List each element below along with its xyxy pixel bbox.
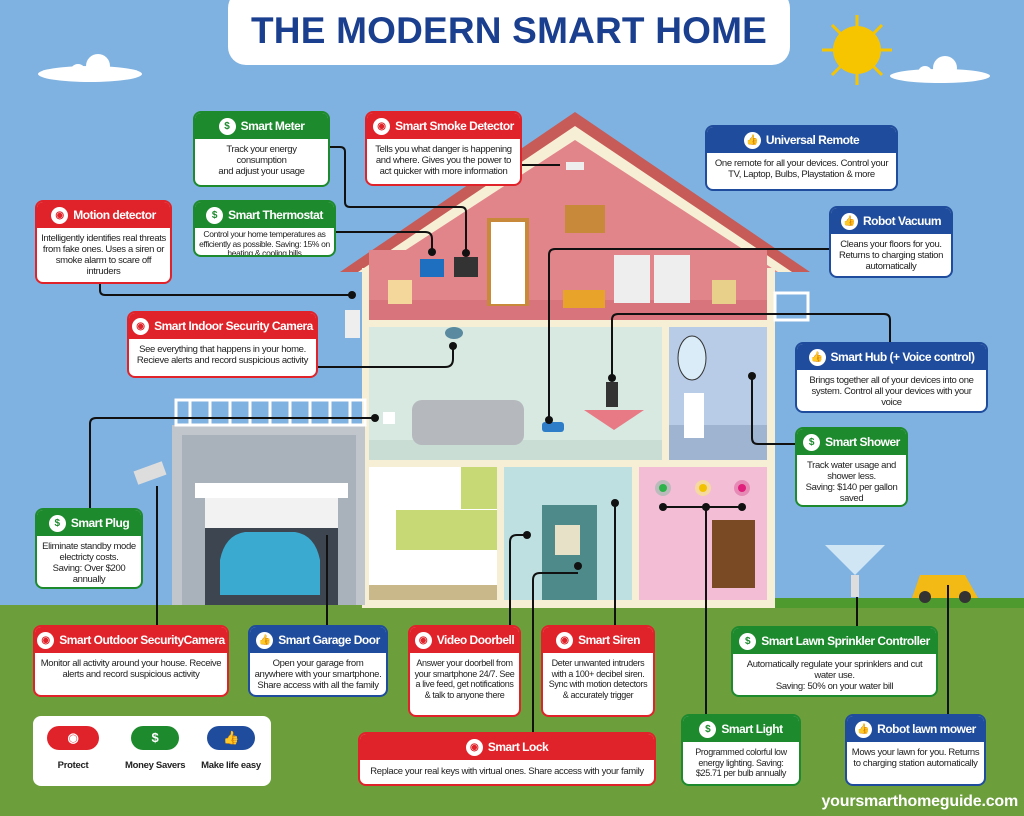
card: Smart Light — [681, 714, 801, 786]
card: Smart Light: Programmed colorful low energy lighting. Saving: $25.71 per bulb annually — [695, 747, 787, 778]
card: Smart Light: $ — [705, 724, 711, 734]
card: Smart Lock: ◉ — [470, 742, 479, 752]
card: Robot lawn mower — [845, 714, 986, 786]
card: Smart Lawn Sprinkler Controller: Automatically regulate your sprinklers and cut water use. — [747, 659, 922, 681]
legend: protect: Protect — [58, 760, 88, 771]
card: Smart Meter — [193, 111, 330, 187]
card: Smart Garage Door: Open your garage from anywhere with your smartphone. Share access with all the family — [255, 658, 381, 691]
card: Universal Remote: 👍 — [746, 134, 759, 146]
card: Robot lawn mower: 👍 — [857, 724, 870, 734]
card: Smart Smoke Detector: Smart Smoke Detector — [395, 119, 514, 133]
card: Smart Smoke Detector: ◉ — [377, 120, 386, 132]
card: Smart Outdoor SecurityCamera: ◉ — [41, 634, 50, 646]
legend: make life easy: 👍 — [223, 730, 239, 745]
card: Smart Shower: $ — [809, 436, 814, 448]
legend: money savers — [125, 726, 186, 771]
card: Smart Plug — [35, 508, 143, 589]
card: Smart Siren: ◉ — [560, 634, 569, 646]
card: Smart Smoke Detector: Tells you what danger is happening and where. Gives you the power to act quicker with more information — [375, 144, 512, 177]
legend: make life easy: Make life easy — [201, 760, 261, 771]
card: Smart Shower: Saving: $140 per gallon saved — [806, 482, 897, 504]
connector lines — [90, 147, 948, 732]
card: Video Doorbell — [408, 625, 521, 717]
card: Smart Indoor Security Camera: ◉ — [136, 320, 145, 332]
card: Smart Garage Door — [248, 625, 388, 697]
card: Video Doorbell: Answer your doorbell from your smartphone 24/7. See a live feed, get notifications & talk to anyone there — [415, 658, 514, 700]
legend: money savers: Money Savers — [125, 760, 185, 771]
card: Motion detector: ◉ — [55, 210, 64, 220]
title — [228, 0, 790, 65]
footer url: yoursmarthomeguide.com — [821, 793, 1018, 810]
card: Motion detector: Motion detector — [73, 208, 156, 222]
card: Robot lawn mower: Robot lawn mower — [877, 722, 976, 736]
card: Robot Vacuum: 👍 — [843, 216, 856, 226]
card: Smart Meter: and adjust your usage — [218, 166, 305, 177]
card: Video Doorbell: ◉ — [419, 634, 428, 646]
card: Smart Siren — [541, 625, 655, 717]
card: Smart Plug: Smart Plug — [71, 516, 129, 530]
card: Smart Outdoor SecurityCamera — [33, 625, 229, 697]
card: Smart Thermostat — [193, 200, 336, 257]
card: Smart Indoor Security Camera — [127, 311, 318, 378]
card: Smart Thermostat: $ — [212, 210, 217, 220]
card: Smart Meter: consumption — [236, 155, 286, 166]
card: Smart Lawn Sprinkler Controller: Saving: 50% on your water bill — [776, 681, 893, 692]
card: Smart Shower — [795, 427, 908, 507]
card: Smart Shower: Smart Shower — [825, 435, 900, 449]
legend: money savers: $ — [152, 730, 158, 745]
card: Universal Remote — [705, 125, 898, 191]
clouds — [38, 54, 990, 83]
legend: protect — [47, 726, 99, 771]
card: Smart Meter: Track your energy — [226, 144, 297, 155]
card: Smart Smoke Detector — [365, 111, 522, 186]
card: Robot Vacuum: Robot Vacuum — [863, 214, 941, 228]
card: Motion detector: Intelligently identifies real threats from fake ones. Uses a siren or smoke alarm to scare off intruders — [41, 233, 166, 277]
card: Smart Indoor Security Camera: Smart Indoor Security Camera — [154, 319, 313, 333]
card: Universal Remote: Universal Remote — [766, 133, 859, 147]
card: Smart Meter: Smart Meter — [241, 119, 304, 133]
card: Smart Garage Door: 👍 — [258, 634, 271, 646]
card: Smart Plug: Saving: Over $200 annually — [53, 563, 125, 585]
card: Smart Siren: Deter unwanted intruders with a 100+ decibel siren. Sync with motion detectors & accurately trigger — [549, 658, 647, 700]
card: Smart Hub — [795, 342, 988, 413]
card: Smart Lock: Smart Lock — [488, 740, 548, 754]
card: Robot Vacuum: Cleans your floors for you. Returns to charging station automatically — [839, 239, 943, 272]
card: Smart Lawn Sprinkler Controller: $ — [745, 636, 750, 646]
card: Smart Light: Smart Light — [721, 722, 783, 736]
sprinkler & mower — [825, 545, 885, 575]
card: Smart Siren: Smart Siren — [578, 633, 640, 647]
house — [134, 112, 810, 608]
card: Robot Vacuum — [829, 206, 953, 278]
card: Universal Remote: One remote for all your devices. Control your TV, Laptop, Bulbs, Playstation & more — [715, 158, 888, 180]
card: Smart Shower: Track water usage and shower less. — [807, 460, 896, 482]
card: Smart Hub: Brings together all of your devices into one system. Control all your devices with your voice — [809, 375, 974, 408]
card: Smart Indoor Security Camera: See everything that happens in your home. Recieve alerts and record suspicious activity — [137, 344, 308, 366]
legend: protect: ◉ — [67, 730, 79, 745]
card: Smart Hub: Smart Hub (+ Voice control) — [831, 350, 974, 364]
sun — [822, 15, 892, 85]
card: Smart Lock — [358, 732, 656, 786]
legend — [33, 716, 271, 786]
card: Smart Outdoor SecurityCamera: Monitor all activity around your house. Receive alerts and record suspicious activity — [41, 658, 221, 680]
card: Smart Lawn Sprinkler Controller: Smart Lawn Sprinkler Controller — [761, 634, 930, 648]
card: Smart Outdoor SecurityCamera: Smart Outdoor SecurityCamera — [59, 633, 225, 647]
title: THE MODERN SMART HOME — [251, 10, 767, 51]
card: Smart Lock: Replace your real keys with virtual ones. Share access with your family — [370, 766, 644, 777]
card: Robot lawn mower: Mows your lawn for you. Returns to charging station automatically — [852, 747, 979, 769]
card: Smart Plug: Eliminate standby mode electricty costs. — [42, 541, 136, 563]
card: Smart Hub: 👍 — [811, 352, 823, 362]
card: Motion detector — [35, 200, 172, 284]
card: Smart Garage Door: Smart Garage Door — [278, 633, 380, 647]
card: Video Doorbell: Video Doorbell — [437, 633, 514, 647]
legend: make life easy — [201, 726, 262, 771]
card: Smart Meter: $ — [224, 120, 230, 132]
card: Smart Thermostat: Smart Thermostat — [228, 208, 323, 222]
card: Smart Plug: $ — [55, 518, 60, 528]
card: Smart Lawn Sprinkler Controller — [731, 626, 938, 697]
ground — [0, 605, 1024, 816]
